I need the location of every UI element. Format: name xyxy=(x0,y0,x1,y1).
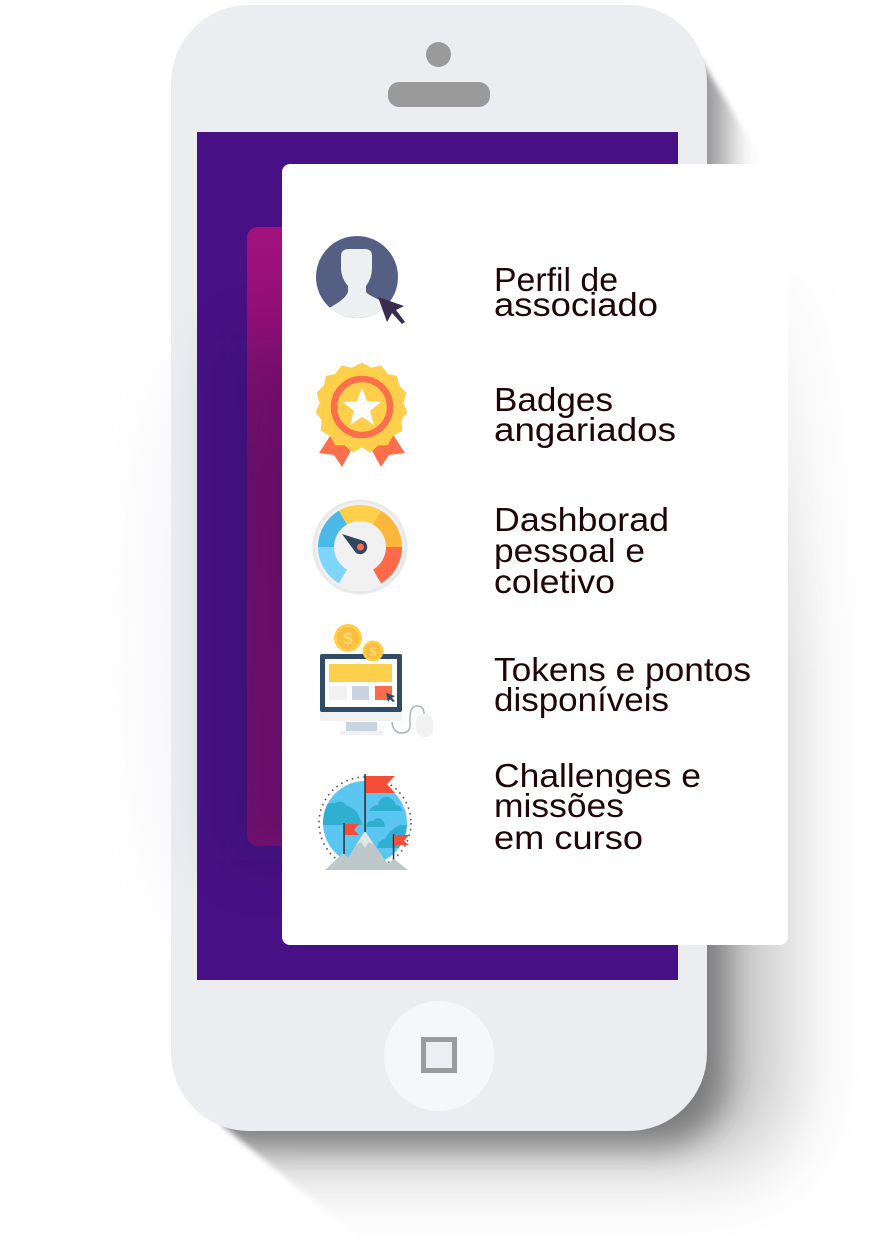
text: Badges angariados: Badges xyxy=(494,381,613,418)
text: Dashborad pessoal e coletivo: coletivo xyxy=(494,563,615,600)
white feature card xyxy=(282,164,788,945)
phone long shadow xyxy=(171,5,786,1166)
text: Tokens e pontos disponíveis xyxy=(494,651,751,718)
icon: tokens monitor: $ xyxy=(343,629,353,648)
text: Perfil de associado xyxy=(494,261,658,323)
text: Challenges e missões em curso: em curso xyxy=(494,819,643,856)
icon: mountain flags xyxy=(319,774,411,870)
icon: tokens monitor: $ xyxy=(369,644,377,659)
card shadow on phone xyxy=(194,324,282,850)
soft glow left of phone xyxy=(140,360,240,920)
home button xyxy=(384,1001,494,1111)
home square icon xyxy=(424,1040,454,1070)
text: Badges angariados xyxy=(494,381,676,448)
speaker xyxy=(388,82,490,107)
camera xyxy=(426,42,451,67)
text: Challenges e missões em curso xyxy=(494,757,701,856)
text: Dashborad pessoal e coletivo: pessoal e xyxy=(494,532,645,569)
icon: dashboard gauge xyxy=(314,501,406,593)
text: Tokens e pontos disponíveis: disponíveis xyxy=(494,681,669,718)
text: Tokens e pontos disponíveis: Tokens e pontos xyxy=(494,651,751,688)
text: Dashborad pessoal e coletivo xyxy=(494,501,669,600)
screen xyxy=(197,132,678,980)
icon: badge medal xyxy=(317,364,406,467)
icon: tokens monitor xyxy=(320,624,433,737)
text: Perfil de associado: associado xyxy=(494,286,658,323)
inner magenta panel xyxy=(247,227,367,846)
text: Dashborad pessoal e coletivo: Dashborad xyxy=(494,501,669,538)
text: Challenges e missões em curso: Challenges e xyxy=(494,757,701,794)
icon: profile avatar with cursor xyxy=(316,236,405,324)
phone body xyxy=(171,5,707,1131)
text: Badges angariados: angariados xyxy=(494,411,676,448)
text: Challenges e missões em curso: missões xyxy=(494,787,624,824)
text: Perfil de associado: Perfil de xyxy=(494,261,618,298)
